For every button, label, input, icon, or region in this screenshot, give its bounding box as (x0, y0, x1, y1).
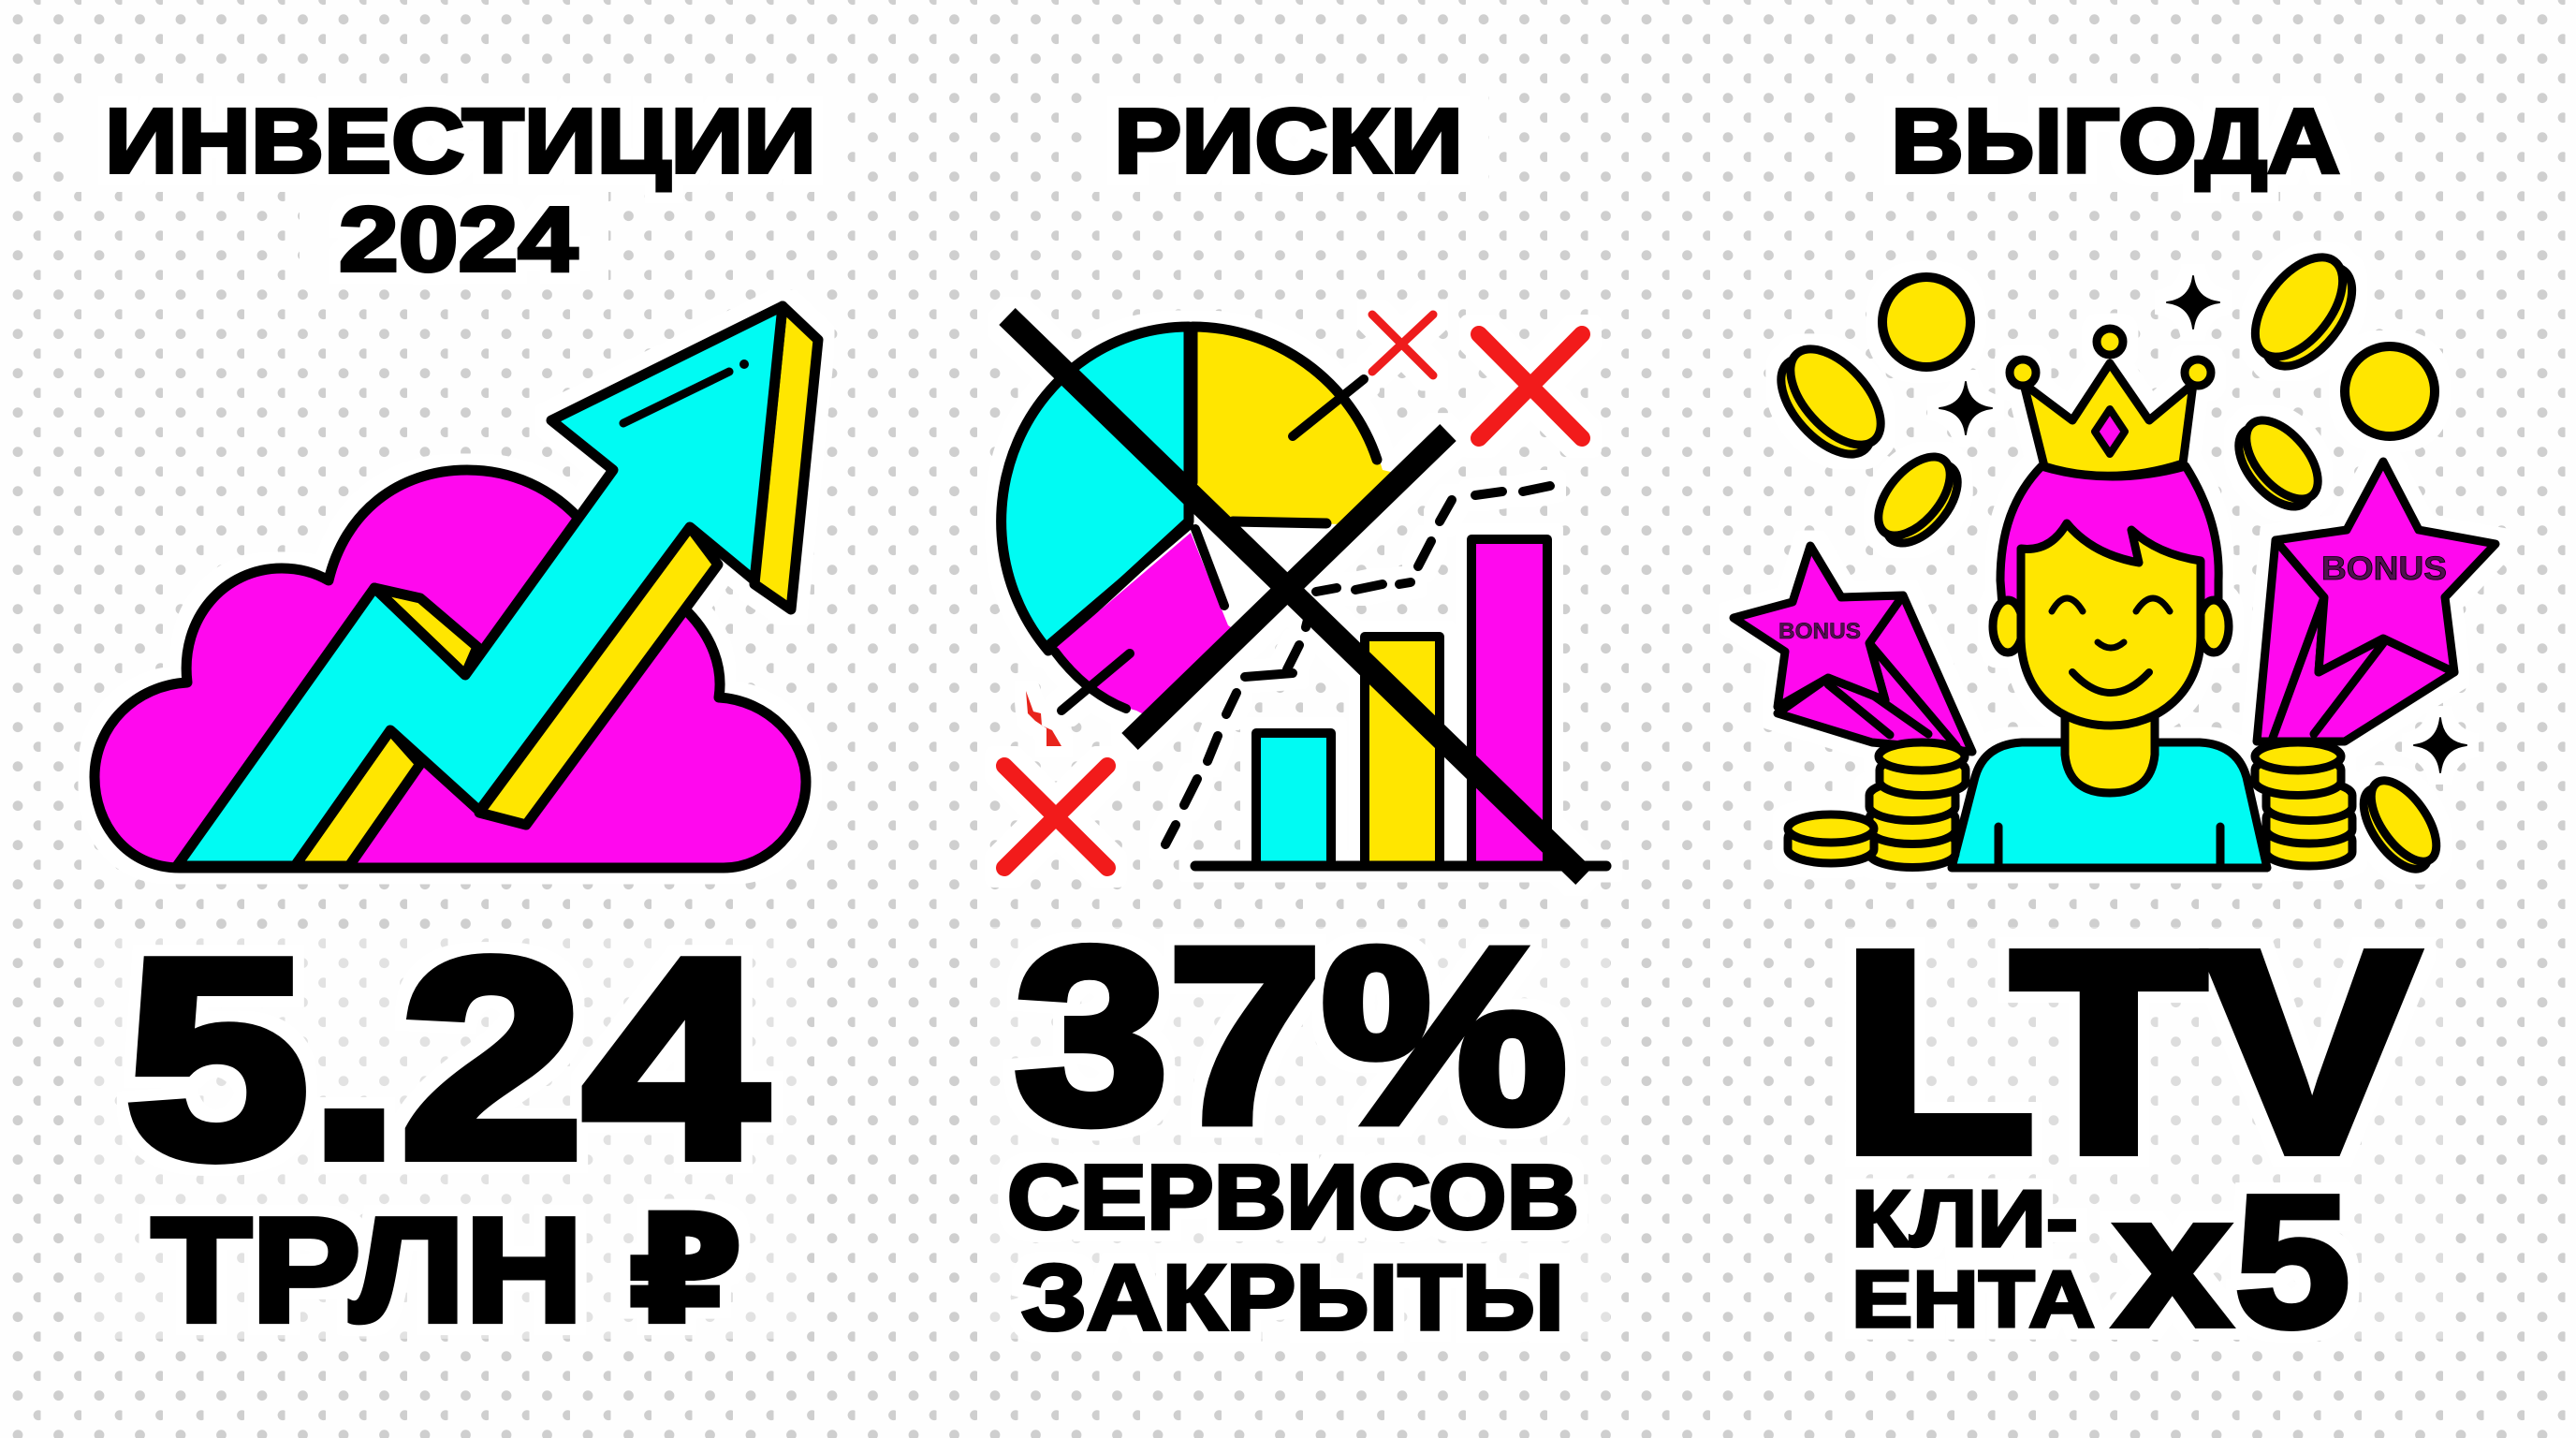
heading line: 2024: 2024 (339, 188, 578, 290)
crown ball right (2185, 360, 2211, 386)
tilted coin upper left (1764, 333, 1897, 470)
magenta slice tick (1061, 653, 1130, 711)
right star (2276, 462, 2496, 672)
arrow middle side (374, 588, 477, 675)
hair (2000, 466, 2218, 618)
arrow tail side (295, 730, 420, 866)
flat coin right (2345, 346, 2435, 436)
yellow slice tick (1293, 379, 1364, 436)
chart baseline (1195, 861, 1606, 871)
stat: lifetime value (1841, 892, 2420, 1366)
icon: happy crowned client with coins and bonus stars (1734, 242, 2496, 880)
sparkle left (1939, 382, 1992, 434)
multiplier: x: x (2115, 1157, 2230, 1365)
white centre wedge (1189, 521, 1310, 625)
icon: cloud with rising arrow (95, 306, 818, 868)
arrow highlight (623, 372, 729, 423)
acronym: LTV: LTV (1841, 892, 2420, 1211)
label: closed: ЗАКРЫТЫ (1021, 1245, 1564, 1349)
label: client line 1: КЛИ- (1852, 1175, 2078, 1264)
heading: investments 2024 (105, 90, 816, 290)
icon: crossed-out pie and bar charts (1002, 315, 1606, 876)
arrow lower side (479, 527, 718, 825)
tilted coin bottom right (2351, 770, 2449, 880)
face (2021, 523, 2201, 726)
crown gem (2095, 409, 2125, 454)
red fragment (1026, 691, 1061, 746)
red cross: bottom left (1004, 766, 1107, 868)
right ear (2199, 600, 2229, 653)
label: services: СЕРВИСОВ (1007, 1146, 1579, 1248)
number: 5.24: 5.24 (125, 901, 768, 1216)
stat: risks share (1007, 897, 1579, 1349)
arrow front (177, 306, 783, 866)
big cross line 1 (1007, 316, 1584, 876)
bar: cyan (1256, 733, 1331, 866)
pie slice: yellow (1193, 330, 1395, 524)
big cross line 2 (1130, 433, 1448, 741)
tilted coin lower right (2225, 407, 2332, 520)
nose (2098, 642, 2124, 648)
neck (2065, 712, 2155, 793)
mouth (2072, 672, 2149, 693)
arrow head side (754, 306, 818, 609)
shirt (1952, 742, 2267, 868)
right star trail (2257, 540, 2454, 741)
left star trail (1778, 595, 1972, 752)
sparkle right (2414, 718, 2466, 772)
crown ball centre (2097, 329, 2123, 355)
dashed trend line (1165, 486, 1550, 844)
right bonus label: BONUS (2321, 550, 2447, 587)
sparkle top (2167, 276, 2219, 329)
number: 37%: 37% (1015, 897, 1567, 1175)
unit: trillion rubles: ТРЛН ₽ (152, 1188, 742, 1353)
magenta slice outline (1048, 525, 1224, 709)
coin stack left (1869, 742, 1966, 867)
right star trail lines (2273, 597, 2383, 738)
left ear (1993, 600, 2023, 653)
tilted coin lower left (1865, 444, 1971, 556)
stat: investments amount (125, 901, 768, 1353)
eyes (2052, 598, 2170, 611)
coin stack right (2255, 742, 2352, 866)
flat coin left (1882, 277, 1970, 367)
heading: benefit: ВЫГОДА (1891, 90, 2340, 192)
bar: magenta (1471, 539, 1547, 866)
crown (2024, 363, 2193, 476)
red cross: small (1372, 315, 1433, 375)
pie slice: cyan (1002, 327, 1189, 651)
left star (1734, 546, 1903, 707)
crown ball left (2010, 360, 2036, 386)
cloud (95, 470, 806, 868)
tilted coin upper right (2238, 242, 2369, 382)
left bonus label: BONUS (1778, 619, 1861, 644)
pie slice: magenta (1055, 533, 1245, 721)
heading line: ИНВЕСТИЦИИ: ИНВЕСТИЦИИ (105, 90, 816, 192)
label: client line 2: ЕНТА (1852, 1255, 2095, 1344)
single coin pile left (1788, 814, 1874, 863)
shirt folds (1998, 827, 2220, 866)
yellow slice outline (1193, 327, 1377, 523)
left star trail lines (1828, 643, 1956, 746)
arrow highlight dot (739, 360, 749, 369)
bar: yellow (1365, 637, 1440, 866)
heading: risks: РИСКИ (1114, 90, 1463, 192)
red cross: top right (1479, 334, 1582, 438)
multiplier: 5: 5 (2235, 1158, 2349, 1366)
